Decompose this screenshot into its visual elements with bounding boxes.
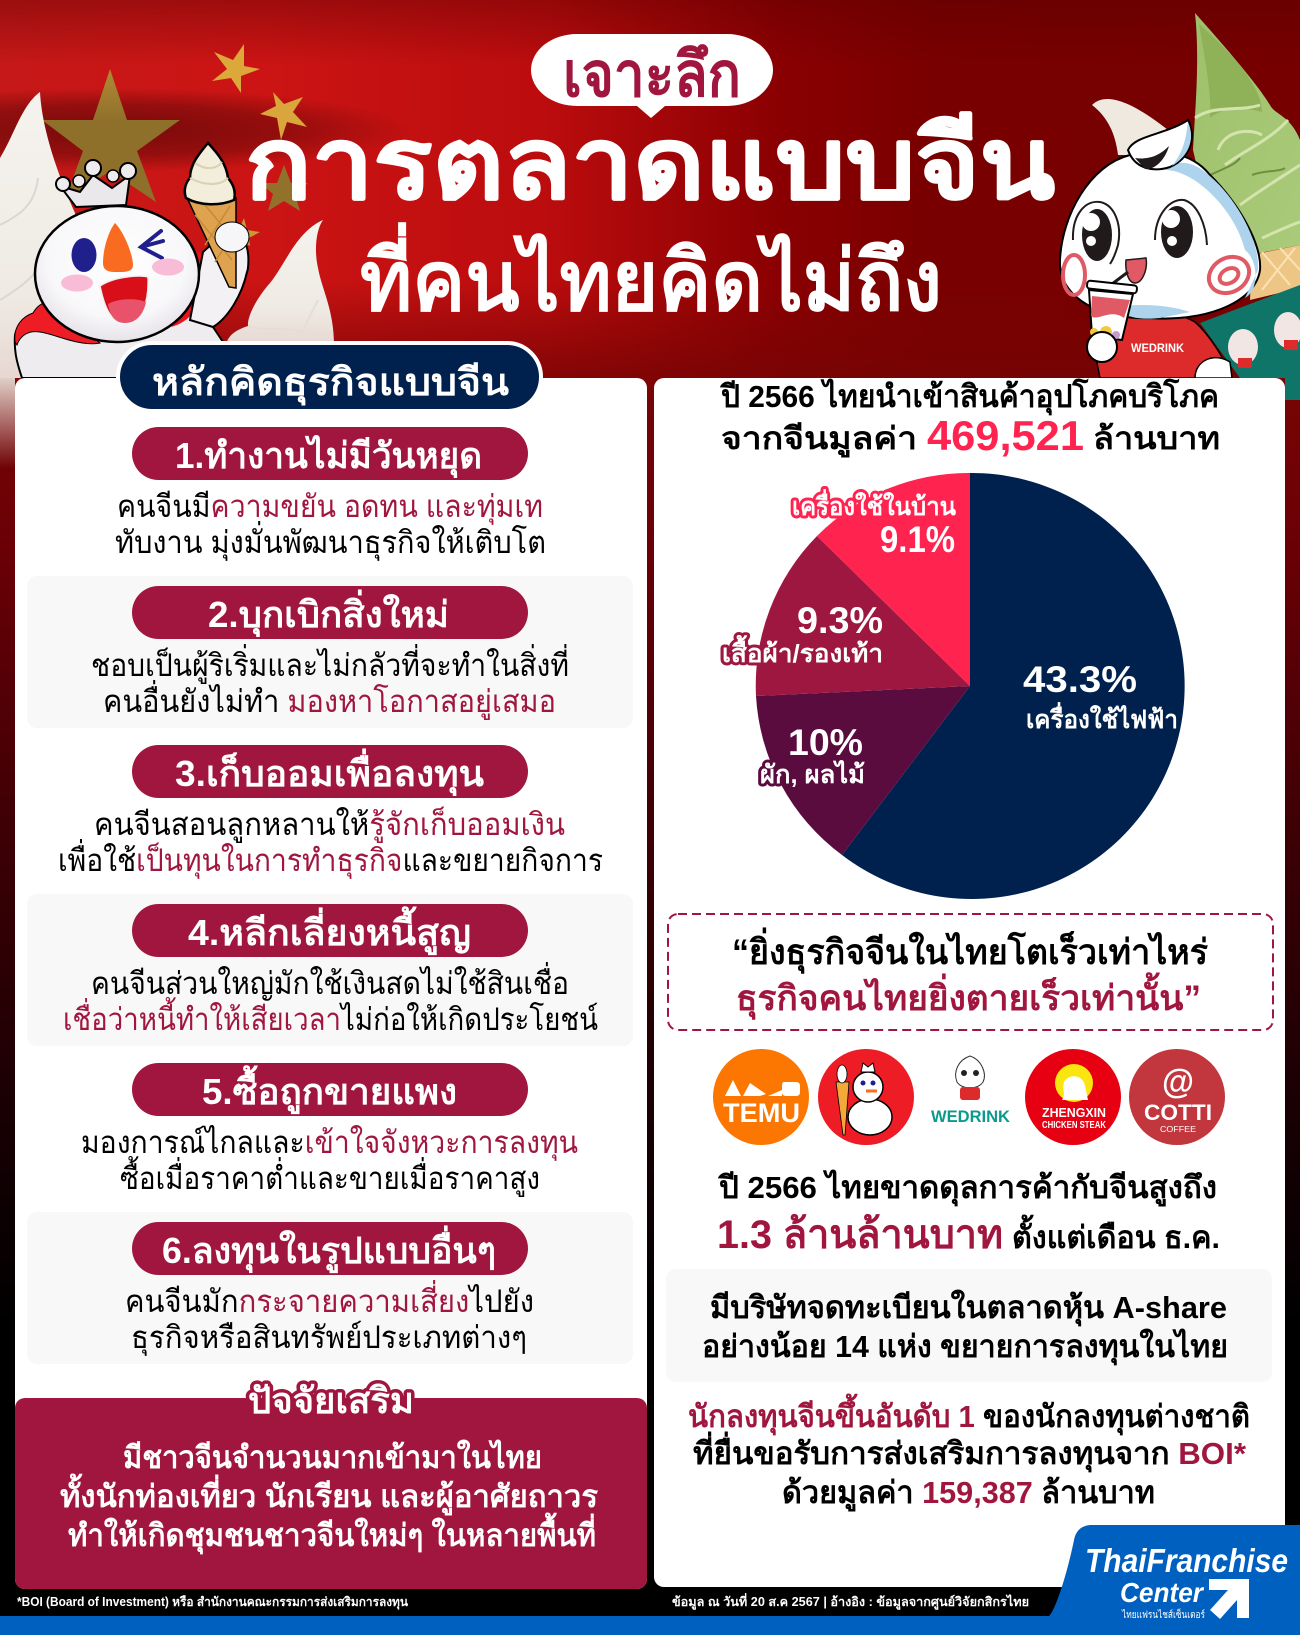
head: [1060, 152, 1260, 319]
footnote: data source: ข้อมูล ณ วันที่ 20 ส.ค 2567 | อ้างอิง : ข้อมูลจากศูนย์วิจัยกสิกรไทย: [672, 1593, 1029, 1610]
pie chart: imports by category: เสื้อผ้า/รองเท้า: [722, 634, 883, 668]
import heading: 469,521: [927, 412, 1084, 459]
principle 4: คนจีนส่วนใหญ่มักใช้เงินสดไม่ใช้สินเชื่อ: [91, 962, 569, 1001]
trade deficit text: ตั้งแต่เดือน ธ.ค.: [1012, 1214, 1220, 1255]
logo: Zhengxin: [1025, 1049, 1121, 1145]
mouth: [1126, 258, 1146, 283]
logo: Zhengxin: CHICKEN STEAK: [1042, 1120, 1107, 1131]
teal packaging: [1200, 285, 1300, 400]
principle 6: ธุรกิจหรือสินทรัพย์ประเภทต่างๆ: [131, 1320, 527, 1357]
extra factors panel: [15, 1380, 647, 1589]
extra factors panel: ทั้งนักท่องเที่ยว นักเรียน และผู้อาศัยถาวร: [60, 1473, 598, 1516]
principle 2: 2.บุกเบิกสิ่งใหม่: [208, 589, 449, 638]
principle 4: [63, 904, 598, 1037]
logo: Cotti Coffee: [1129, 1049, 1225, 1145]
footnote: BOI definition: *BOI (Board of Investment) หรือ สำนักงานคณะกรรมการส่งเสริมการลงทุน: [17, 1595, 408, 1610]
principle 1: 1.ทำงานไม่มีวันหยุด: [175, 434, 482, 479]
logo: Cotti Coffee: @: [1162, 1063, 1194, 1101]
face: [61, 223, 184, 323]
panel: Chinese business principles: [15, 343, 647, 1589]
white soft serve behind mascot: [1092, 99, 1168, 155]
tuft: [1128, 120, 1192, 169]
BOI investment text: นักลงทุนจีนขึ้นอันดับ 1 ของนักลงทุนต่างชาติ: [688, 1393, 1250, 1436]
eyes: [1073, 200, 1207, 264]
quote box: “ยิ่งธุรกิจจีนในไทยโตเร็วเท่าไหร่: [732, 927, 1208, 974]
trade deficit text: [717, 1169, 1220, 1257]
mascot: Mixue snow king: [15, 143, 249, 378]
extra factors panel: ทำให้เกิดชุมชนชาวจีนใหม่ๆ ในหลายพื้นที่: [68, 1512, 596, 1555]
logo: Cotti Coffee: COFFEE: [1160, 1125, 1196, 1134]
arm: [190, 235, 248, 327]
logo: Wedrink: [931, 1056, 1011, 1126]
trade deficit text: ปี 2566 ไทยขาดดุลการค้ากับจีนสูงถึง: [718, 1169, 1217, 1207]
principle 5: 5.ซื้อถูกขายแพง: [202, 1065, 457, 1115]
panel heading pill: หลักคิดธุรกิจแบบจีน: [152, 362, 509, 406]
pie chart: imports by category: [722, 473, 1185, 899]
logo: Wedrink: WEDRINK: [931, 1107, 1011, 1126]
logo: Temu: [713, 1049, 809, 1145]
top tag: เจาะลึก: เจาะลึก: [563, 41, 741, 110]
BOI investment text: ที่ยื่นขอรับการส่งเสริมการลงทุนจาก BOI*: [693, 1431, 1247, 1473]
principle 1: ทับงาน มุ่งมั่นพัฒนาธุรกิจให้เติบโต: [115, 521, 546, 562]
BOI investment text: [688, 1393, 1250, 1512]
principle 4: เชื่อว่าหนี้ทำให้เสียเวลาไม่ก่อให้เกิดประโยชน์: [63, 997, 598, 1037]
arrow icon: [1209, 1579, 1249, 1619]
green soft serve and cone: [1193, 13, 1300, 300]
crown: [56, 160, 136, 207]
A-share callout: มีบริษัทจดทะเบียนในตลาดหุ้น A-share: [710, 1289, 1227, 1327]
shirt label: WEDRINK: [1131, 341, 1184, 355]
principle 2: [91, 586, 569, 720]
ice cream cone: [185, 143, 249, 288]
principle 1: [115, 427, 546, 562]
logo: Temu: TEMU: [723, 1098, 800, 1128]
body and scarf: [15, 252, 225, 378]
pie chart: imports by category: 10%: [788, 722, 863, 763]
logo: Mixue: [818, 1049, 914, 1145]
logo: ThaiFranchise Center: ไทยแฟรนไชส์เซ็นเตอร์: [1121, 1607, 1206, 1621]
principle 2: คนอื่นยังไม่ทำ มองหาโอกาสอยู่เสมอ: [103, 680, 556, 720]
principle 5: [81, 1063, 578, 1197]
import heading: ล้านบาท: [1093, 421, 1220, 456]
pie chart: imports by category: 9.1%: [880, 519, 955, 560]
logo: ThaiFranchise Center: [1036, 1525, 1300, 1635]
import heading: [720, 378, 1220, 459]
principle 5: ซื้อเมื่อราคาต่ำและขายเมื่อราคาสูง: [120, 1156, 540, 1197]
top tag: เจาะลึก: [531, 34, 773, 118]
A-share callout: [666, 1269, 1272, 1382]
drink cup: [1087, 272, 1137, 362]
main title: การตลาดแบบจีน: [245, 108, 1055, 220]
principle 3: คนจีนสอนลูกหลานให้รู้จักเก็บออมเงิน: [94, 806, 565, 843]
panel: China trade data: [654, 378, 1285, 1587]
import heading: ปี 2566 ไทยนำเข้าสินค้าอุปโภคบริโภค: [720, 378, 1219, 416]
main title: [245, 108, 1055, 328]
BOI investment text: ด้วยมูลค่า 159,387 ล้านบาท: [782, 1475, 1155, 1512]
logo: ThaiFranchise Center: Center: [1120, 1577, 1205, 1608]
shirt: [1096, 311, 1232, 378]
principle 3: เพื่อใช้เป็นทุนในการทำธุรกิจและขยายกิจการ: [58, 839, 603, 880]
quote box: [668, 914, 1273, 1030]
panel heading pill: [118, 343, 541, 411]
import heading: จากจีนมูลค่า: [721, 421, 917, 458]
principle 1: คนจีนมีความขยัน อดทน และทุ่มเท: [117, 489, 543, 526]
logo: Cotti Coffee: COTTI: [1144, 1100, 1212, 1125]
logo: Zhengxin: ZHENGXIN: [1042, 1105, 1106, 1120]
principle 6: 6.ลงทุนในรูปแบบอื่นๆ: [162, 1225, 496, 1274]
soft serve decorations: [0, 92, 334, 468]
head: [35, 206, 199, 342]
alternating row backgrounds: [27, 576, 633, 1364]
extra factors panel: ปัจจัยเสริม: [248, 1380, 414, 1421]
principle 2: ชอบเป็นผู้ริเริ่มและไม่กลัวที่จะทำในสิ่งที่: [91, 644, 569, 684]
pie chart: imports by category: 43.3%: [1023, 659, 1137, 700]
cheeks: [1063, 250, 1256, 300]
pie chart: imports by category: 9.3%: [797, 600, 883, 641]
brand logos: [713, 1049, 1225, 1145]
mascot: Wedrink: [1060, 120, 1260, 378]
principle 6: [125, 1222, 534, 1357]
quote box: ธุรกิจคนไทยยิ่งตายเร็วเท่านั้น”: [736, 972, 1201, 1020]
main title: ที่คนไทยคิดไม่ถึง: [360, 222, 942, 328]
pie chart: imports by category: เครื่องใช้ไฟฟ้า: [1026, 702, 1178, 734]
principle 4: 4.หลีกเลี่ยงหนี้สูญ: [188, 906, 471, 956]
principle 6: คนจีนมักกระจายความเสี่ยงไปยัง: [125, 1280, 534, 1319]
A-share callout: อย่างน้อย 14 แห่ง ขยายการลงทุนในไทย: [702, 1328, 1228, 1366]
principle 3: [58, 745, 603, 880]
pie chart: imports by category: เครื่องใช้ในบ้าน: [792, 489, 956, 521]
trade deficit text: 1.3 ล้านล้านบาท: [717, 1213, 1003, 1257]
principle 3: 3.เก็บออมเพื่อลงทุน: [175, 748, 484, 797]
principle 5: มองการณ์ไกลและเข้าใจจังหวะการลงทุน: [81, 1125, 578, 1162]
extra factors panel: มีชาวจีนจำนวนมากเข้ามาในไทย: [123, 1439, 542, 1475]
decorative gold stars: [42, 44, 308, 246]
pie chart: imports by category: ผัก, ผลไม้: [760, 759, 865, 789]
